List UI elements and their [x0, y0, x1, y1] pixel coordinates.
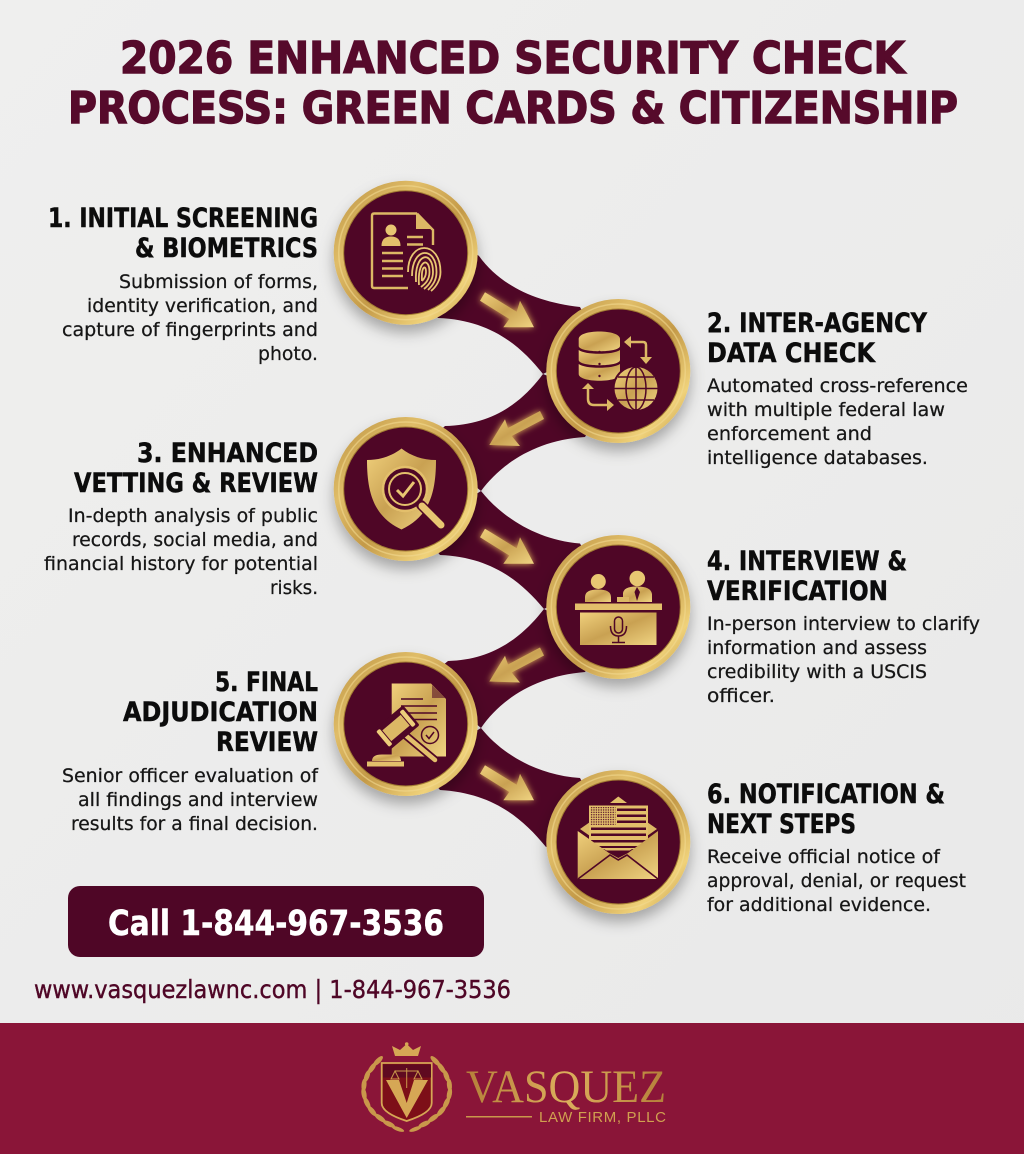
- text: step 4: In-person interview to clarify: [707, 613, 980, 635]
- arrow: step 3 to 4: [480, 529, 534, 564]
- text: step 5: [62, 667, 319, 835]
- icon: document and fingerprint: [372, 213, 442, 294]
- text: step 1: identity verification, and: [87, 295, 318, 317]
- text: step 2: enforcement and: [707, 423, 872, 445]
- text: step 6: Receive official notice of: [707, 846, 941, 868]
- logo: wordmark: LAW FIRM, PLLC: [539, 1109, 666, 1126]
- text: step 2: with multiple federal law: [707, 399, 945, 421]
- text: step 6: NEXT STEPS: [707, 809, 856, 840]
- text: step 3: VETTING & REVIEW: [74, 468, 318, 499]
- winding ribbon connecting steps: [420, 245, 605, 847]
- text: step 2: DATA CHECK: [707, 338, 876, 369]
- icon: envelope with flag: [578, 796, 658, 879]
- text: step 5: Senior officer evaluation of: [62, 765, 319, 787]
- text: step 5: 5. FINAL: [215, 667, 318, 698]
- text: step 1: capture of fingerprints and: [62, 319, 318, 341]
- icon: shield and magnifier: [367, 448, 441, 530]
- text: step 5: results for a final decision.: [71, 813, 318, 835]
- arrow: step 4 to 5: [489, 648, 544, 682]
- text: step 4: officer.: [707, 685, 775, 707]
- text: step 2: intelligence databases.: [707, 447, 928, 469]
- badge: step 1: [334, 181, 478, 325]
- icon: gavel and document: [367, 684, 446, 766]
- text: step 6: for additional evidence.: [707, 894, 931, 916]
- text: step 1: & BIOMETRICS: [135, 233, 318, 264]
- text: step 6: [707, 779, 966, 916]
- text: step 4: information and assess: [707, 637, 927, 659]
- arrow: step 5 to 6: [480, 765, 534, 800]
- text: step 3: financial history for potential: [44, 553, 318, 575]
- text: step 6: 6. NOTIFICATION &: [707, 779, 945, 810]
- icon: database and globe: [579, 332, 660, 412]
- badge: step 4: [546, 535, 690, 679]
- title: 2026 ENHANCED SECURITY CHECK: [120, 33, 907, 84]
- arrow: step 1 to 2: [480, 292, 534, 327]
- call button: Call 1-844-967-3536: [108, 904, 444, 944]
- text: step 5: all findings and interview: [78, 789, 318, 811]
- logo: wordmark: VASQUEZ: [466, 1061, 666, 1113]
- text: step 5: ADJUDICATION: [123, 697, 318, 728]
- text: step 2: Automated cross-reference: [707, 375, 968, 397]
- text: step 2: 2. INTER-AGENCY: [707, 308, 927, 339]
- badge: step 6: [546, 770, 690, 914]
- text: step 2: [707, 308, 968, 469]
- text: step 6: approval, denial, or request: [707, 870, 966, 892]
- badge: step 3: [334, 417, 478, 561]
- footer band: [0, 1023, 1024, 1154]
- text: step 1: Submission of forms,: [119, 271, 318, 293]
- icon: interview desk: [575, 571, 662, 645]
- logo: crest: [360, 1042, 453, 1133]
- text: step 1: [48, 203, 318, 365]
- text: step 4: [707, 546, 980, 707]
- text: step 1: photo.: [258, 343, 318, 365]
- arrow: step 2 to 3: [489, 411, 544, 446]
- text: step 4: 4. INTERVIEW &: [707, 546, 907, 577]
- text: step 3: risks.: [270, 577, 318, 599]
- text: step 5: REVIEW: [216, 727, 318, 758]
- text: step 4: credibility with a USCIS: [707, 661, 927, 683]
- text: step 1: 1. INITIAL SCREENING: [48, 203, 318, 234]
- text: step 3: [44, 438, 318, 599]
- website and phone line: www.vasquezlawnc.com | 1-844-967-3536: [34, 975, 511, 1004]
- text: step 3: In-depth analysis of public: [68, 505, 318, 527]
- text: step 4: VERIFICATION: [707, 576, 888, 607]
- call button: [68, 886, 484, 957]
- badge: step 2: [546, 299, 690, 443]
- badge: step 5: [334, 652, 478, 796]
- text: step 3: records, social media, and: [72, 529, 318, 551]
- text: step 3: 3. ENHANCED: [137, 438, 318, 469]
- title: [68, 33, 958, 134]
